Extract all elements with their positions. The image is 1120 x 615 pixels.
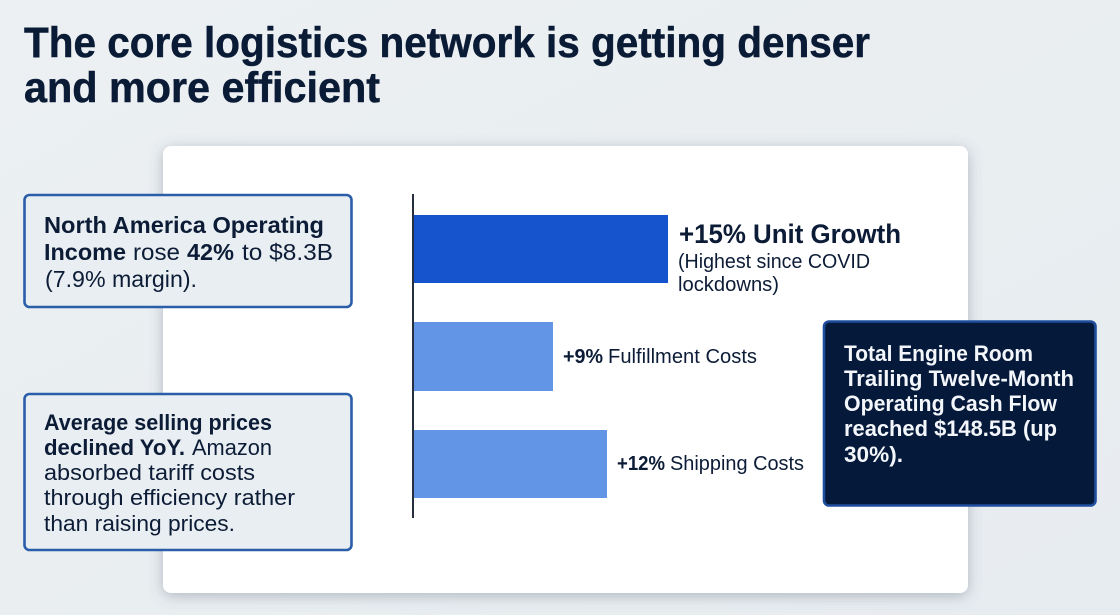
label: fulfillment costs: Fulfillment Costs (608, 346, 757, 368)
label: shipping costs: +12% (617, 453, 665, 475)
label: fulfillment costs: +9% (563, 346, 603, 368)
title: The core logistics network is getting denser (24, 19, 870, 67)
callout: north america operating income: Income (44, 239, 126, 265)
panel: chart card (163, 146, 968, 593)
bar: shipping costs (414, 430, 607, 498)
label: shipping costs: Shipping Costs (670, 453, 804, 475)
label: unit growth (678, 219, 901, 296)
label: unit growth: (Highest since COVID (678, 251, 870, 273)
callout: average selling prices: Amazon (192, 435, 272, 460)
callout: north america operating income: 42% (187, 239, 234, 265)
callout: north america operating income: (7.9% margin). (45, 266, 197, 292)
callout: operating cash flow: Total Engine Room (844, 341, 1033, 366)
callout: operating cash flow: reached $148.5B (up (844, 416, 1057, 441)
callout: operating cash flow: 30%). (844, 442, 903, 467)
callout: average selling prices: through efficiency rather (44, 485, 295, 510)
callout: average selling prices: absorbed tariff costs (44, 460, 255, 485)
title: and more efficient (24, 64, 380, 112)
callout: average selling prices: declined YoY. (44, 435, 185, 460)
bar: fulfillment costs (414, 322, 553, 391)
callout: north america operating income: to $8.3B (242, 239, 333, 265)
label: unit growth: lockdowns) (678, 274, 779, 296)
callout: operating cash flow: Operating Cash Flow (844, 391, 1058, 416)
axis line (412, 194, 414, 518)
callout: operating cash flow: Trailing Twelve-Month (844, 366, 1074, 391)
callout: average selling prices: Average selling prices (44, 410, 272, 435)
callout: north america operating income: North America Operating (44, 212, 324, 238)
callout: operating cash flow (824, 322, 1096, 506)
callout: north america operating income: rose (133, 239, 180, 265)
title (24, 19, 870, 112)
callout: north america operating income (24, 195, 352, 307)
callout: average selling prices: than raising prices. (44, 511, 235, 536)
bar chart (412, 194, 901, 518)
label: unit growth: +15% Unit Growth (679, 219, 901, 249)
callout: average selling prices (24, 394, 352, 550)
bar: unit growth (414, 215, 668, 283)
